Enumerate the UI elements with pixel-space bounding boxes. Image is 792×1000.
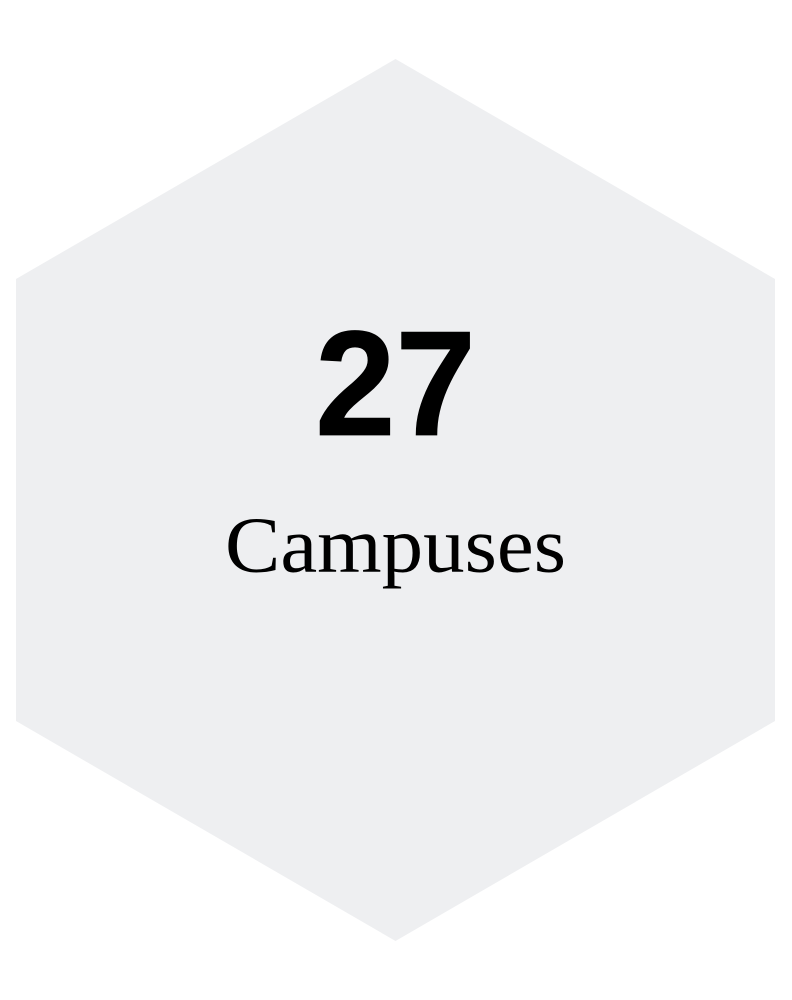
number: 27: 27 — [315, 301, 476, 468]
label: Campuses: Campuses — [225, 502, 566, 590]
